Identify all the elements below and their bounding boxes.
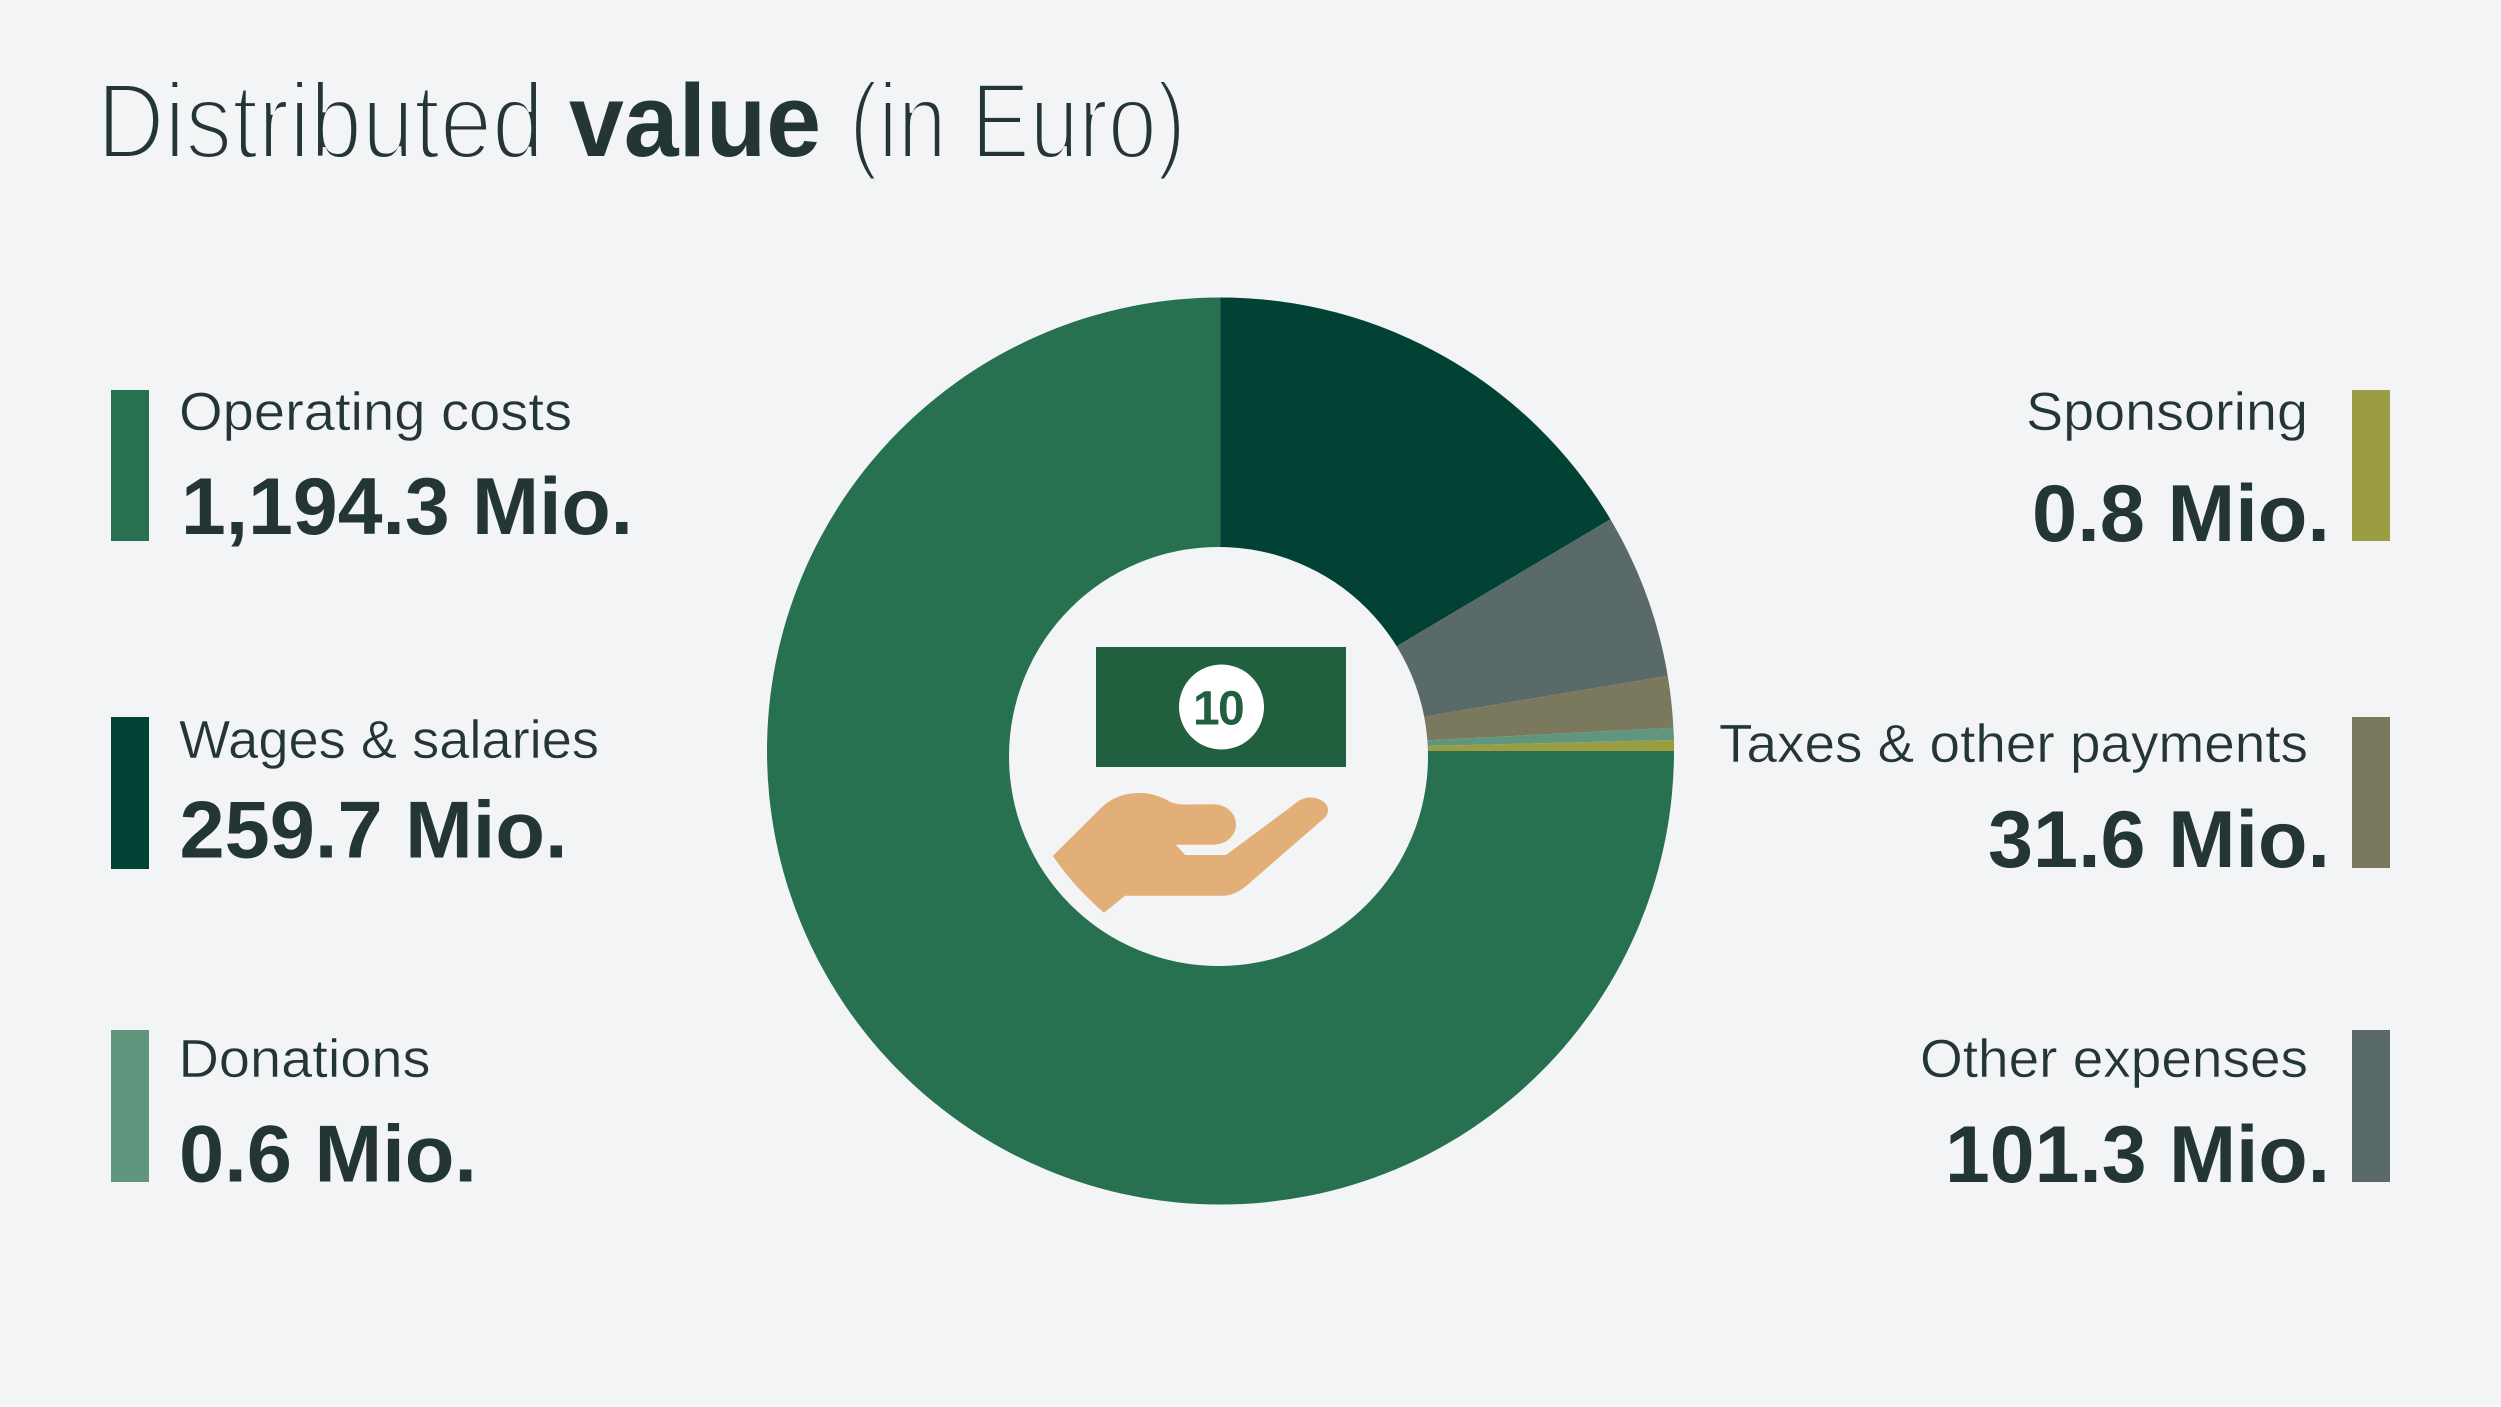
legend: donations xyxy=(111,1029,477,1200)
legend: donations: 0.6 Mio. xyxy=(179,1110,477,1200)
legend: taxes and other payments: 31.6 Mio. xyxy=(1988,795,2330,885)
slice: operating costs xyxy=(767,298,1674,1204)
legend: taxes and other payments xyxy=(1719,714,2390,885)
legend: operating costs: 1,194.3 Mio. xyxy=(181,462,633,552)
title xyxy=(97,60,1186,181)
icon: banknote xyxy=(1096,647,1346,767)
legend: other expenses: Other expenses xyxy=(1920,1029,2308,1089)
donut hole xyxy=(1009,547,1428,966)
title: (in Euro) xyxy=(849,60,1186,181)
icon: open hand xyxy=(1053,793,1328,913)
legend: taxes and other payments: Taxes & other payments xyxy=(1719,714,2308,774)
slice: taxes and other payments xyxy=(1220,676,1673,751)
title: value xyxy=(569,63,821,178)
legend: other expenses xyxy=(1920,1029,2390,1200)
slice: sponsoring xyxy=(1220,740,1674,751)
legend: wages and salaries xyxy=(111,710,599,876)
legend: operating costs xyxy=(111,382,633,552)
legend: operating costs: Operating costs xyxy=(179,382,572,442)
donut chart xyxy=(767,298,1674,1204)
legend: sponsoring: 0.8 Mio. xyxy=(2032,469,2330,559)
legend: wages and salaries: Wages & salaries xyxy=(179,710,599,770)
slice: donations xyxy=(1220,728,1674,751)
slice: wages and salaries xyxy=(1220,298,1610,751)
legend: other expenses: 101.3 Mio. xyxy=(1945,1110,2330,1200)
title: Distributed xyxy=(97,60,544,181)
legend: wages and salaries: 259.7 Mio. xyxy=(180,786,568,876)
legend: sponsoring: Sponsoring xyxy=(2026,382,2308,442)
legend: sponsoring xyxy=(2026,382,2390,559)
icon: banknote: 10 xyxy=(1193,682,1245,736)
legend: donations: Donations xyxy=(178,1029,430,1089)
slice: other expenses xyxy=(1220,519,1668,751)
